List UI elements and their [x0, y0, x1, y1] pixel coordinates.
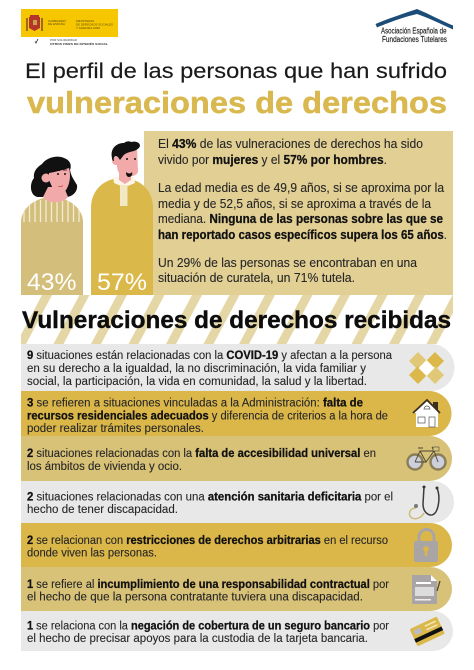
row: responsabilidad contractual [21, 567, 452, 611]
row: COVID-19 [21, 344, 454, 391]
icon: bicycle [408, 447, 446, 470]
row: accesibilidad: 2 situaciones relacionadas con la falta de accesibilidad universal en [27, 448, 376, 460]
text block: age: La edad media es de 49,9 años, si se aproxima por la [158, 181, 444, 195]
row: atención sanitaria [21, 481, 454, 523]
text block: gender split: vivido por mujeres y el 57% por hombres. [158, 153, 387, 167]
text block: guardianship [158, 256, 417, 285]
row: atención sanitaria: hecho de tener discapacidad. [27, 504, 178, 516]
row: COVID-19: social, la participación, la vida en comunidad, la salud y la libertad. [27, 376, 367, 388]
logo: Asociación Española de Fundaciones Tutelares [376, 9, 453, 44]
row: seguro bancario: el hecho de precisar apoyos para la custodia de la tarjeta bancaria. [27, 633, 368, 645]
row: Administración: recursos residenciales adecuados y diferencia de criterios a la hora de [27, 410, 388, 422]
percent: women: 43% [27, 269, 76, 296]
row: restricciones: donde viven las personas. [27, 548, 157, 560]
text block: age: mediana. Ninguna de las personas sobre las que se [158, 212, 443, 226]
row: seguro bancario [21, 611, 453, 651]
panel: profile statistics [144, 131, 453, 295]
row: accesibilidad: los ámbitos de vivienda y ocio. [27, 461, 182, 473]
row: atención sanitaria: 2 situaciones relacionadas con una atención sanitaria deficitaria por el [27, 492, 393, 504]
logo: Gobierno de España: OTROS FINES DE INTERÉS SOCIAL [50, 41, 108, 46]
row: Administración: 3 se refieren a situaciones vinculadas a la Administración: falta de [27, 398, 363, 410]
percent: men: 57% [97, 269, 147, 296]
title: highlighted line: vulneraciones de derechos [27, 85, 447, 120]
row: accesibilidad [21, 436, 452, 481]
logo: Gobierno de España: GOBIERNO [48, 19, 66, 23]
row: seguro bancario: 1 se relaciona con la negación de cobertura de un seguro bancario por [27, 620, 389, 632]
icon: house [413, 400, 440, 427]
text block: age: media y de 52,5 años, si se aproxima a través de la [158, 197, 431, 211]
text block: age: han reportado casos específicos supera los 65 años. [158, 228, 447, 242]
logo: Gobierno de España: MINISTERIO [76, 19, 94, 23]
icon: stethoscope [409, 486, 439, 519]
logo: Gobierno de España: DE DERECHOS SOCIALES [76, 22, 113, 26]
logo: Gobierno de España: Y AGENDA 2030 [76, 26, 101, 30]
logo: Gobierno de España [21, 9, 118, 46]
row: restricciones: 2 se relacionan con restricciones de derechos arbitrarias en el recurso [27, 535, 388, 547]
text block: guardianship: situación de curatela, un 71% tutela. [158, 271, 355, 285]
logo: Asociación Española de Fundaciones Tutelares: Fundaciones Tutelares [382, 35, 447, 44]
title: line one: El perfil de las personas que han sufrido [25, 59, 447, 83]
diagonal stripes band [16, 295, 462, 344]
icon: bank card [410, 617, 445, 646]
row: responsabilidad contractual: 1 se refiere al incumplimiento de una responsabilidad contractual por [27, 579, 389, 591]
icon: diamonds [409, 352, 444, 384]
figure: woman 43% [21, 157, 83, 296]
text block: gender split: El 43% de las vulneraciones de derechos ha sido [158, 137, 423, 151]
heading: Vulneraciones de derechos recibidas: Vulneraciones de derechos recibidas [22, 307, 451, 334]
text block: age [158, 181, 447, 242]
logo: Gobierno de España: DE ESPAÑA [48, 21, 65, 26]
row: Administración [21, 391, 452, 436]
text block: guardianship: Un 29% de las personas se encontraban en una [158, 256, 417, 270]
logo: Gobierno de España: POR SOLIDARIDAD [50, 38, 77, 42]
icon: padlock [414, 530, 438, 562]
row: COVID-19: 9 situaciones están relacionadas con la COVID-19 y afectan a la persona [27, 350, 393, 362]
row: Administración: poder realizar trámites personales. [27, 423, 204, 435]
logo: Asociación Española de Fundaciones Tutelares: Asociación Española de [381, 26, 447, 36]
figure: man 57% [91, 141, 153, 296]
icon: contract [412, 575, 440, 604]
row: responsabilidad contractual: el hecho de que la persona contratante tuviera una discapacidad. [27, 592, 363, 604]
row: restricciones [21, 523, 452, 567]
row: COVID-19: en su derecho a la igualdad, la no discriminación, la vida familiar y [27, 363, 366, 375]
text block: gender split [158, 137, 423, 167]
